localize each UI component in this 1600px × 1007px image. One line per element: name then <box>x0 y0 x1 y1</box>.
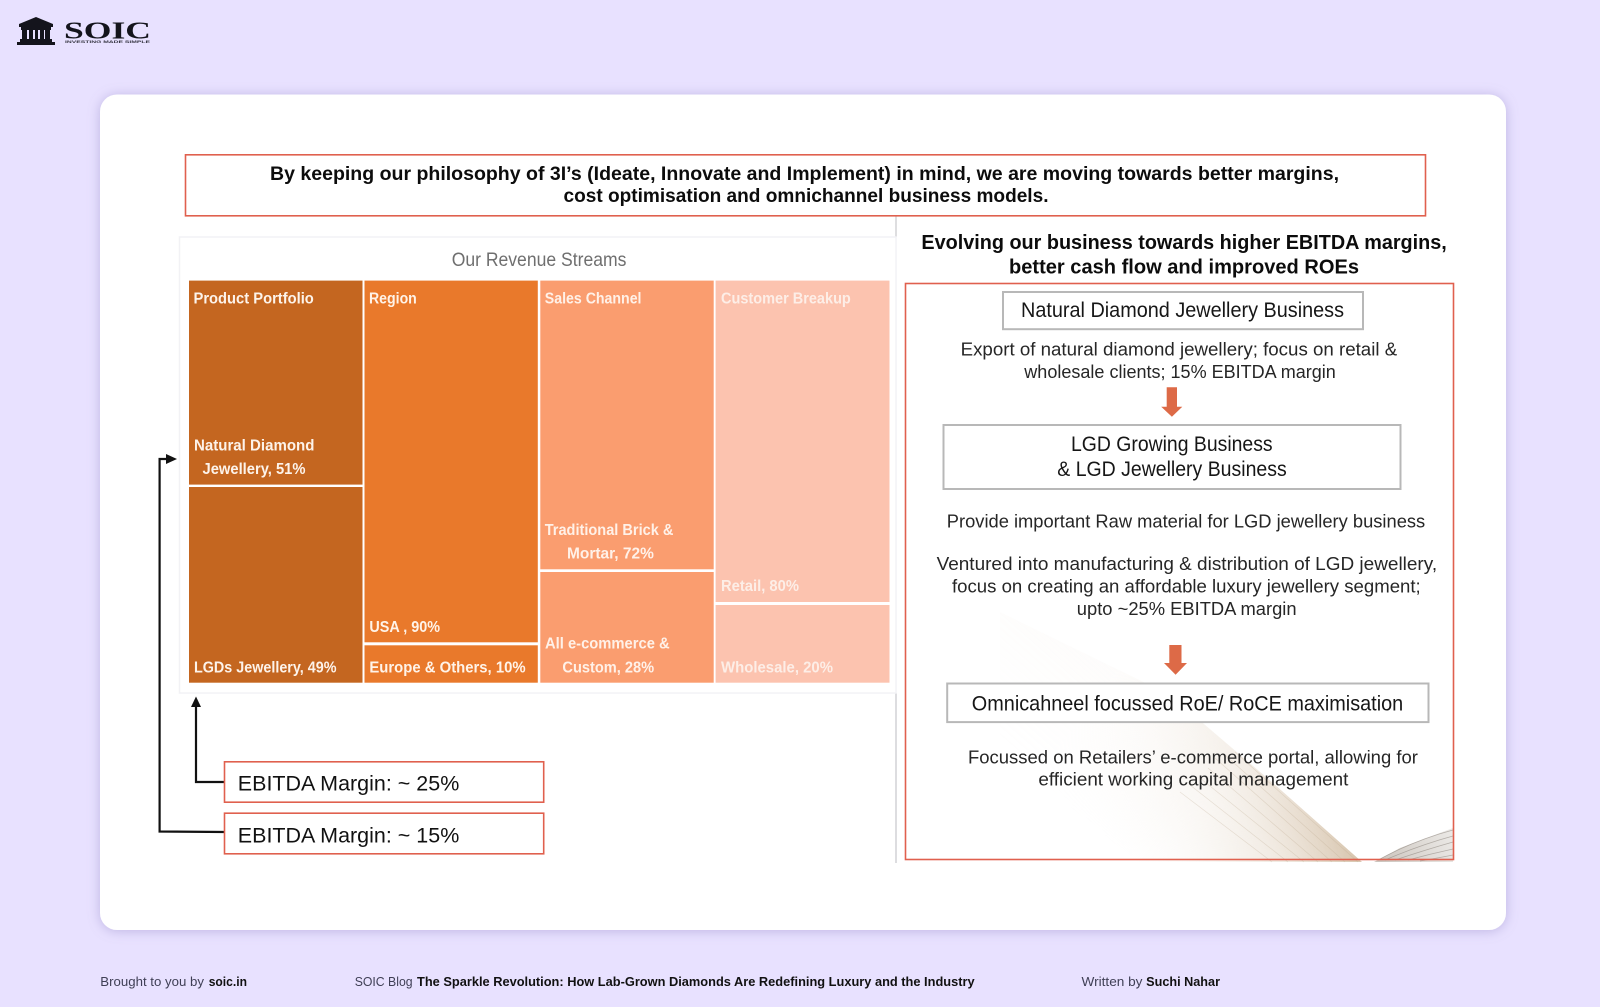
callout: EBITDA margin 25%: EBITDA Margin: ~ 25% <box>238 772 459 796</box>
column: product portfolio: Jewellery, 51% <box>202 461 306 478</box>
headline box <box>186 155 1426 216</box>
white card <box>100 94 1506 930</box>
footer: author <box>1082 975 1220 989</box>
column: sales channel: Sales Channel <box>545 291 642 308</box>
logo wordmark: SOIC <box>64 18 151 44</box>
column: customer breakup: Customer Breakup <box>721 291 851 308</box>
decorative swoosh <box>1154 723 1453 862</box>
step box: natural diamond jewellery business <box>1003 292 1363 329</box>
step box: omnichannel RoE maximisation: Omnicahneel focussed RoE/ RoCE maximisation <box>972 692 1403 716</box>
step box: natural diamond jewellery business: Natural Diamond Jewellery Business <box>1021 298 1344 322</box>
right column heading: Evolving our business towards higher EBITDA margins, <box>921 231 1447 254</box>
column: region: Region <box>369 291 417 308</box>
text: natural diamond description: wholesale clients; 15% EBITDA margin <box>1023 362 1336 382</box>
SOIC logo <box>17 17 151 45</box>
step box: LGD growing business: & LGD Jewellery Business <box>1057 457 1287 481</box>
vertical divider <box>895 216 897 863</box>
text: LGD jewellery description: Ventured into manufacturing & distribution of LGD jewellery, <box>937 554 1437 574</box>
footer: author: Written by <box>1082 975 1143 989</box>
column: region: USA , 90% <box>369 619 440 636</box>
footer: author: Suchi Nahar <box>1146 975 1220 989</box>
column: sales channel: Mortar, 72% <box>567 546 654 563</box>
text: e-commerce portal description <box>968 747 1418 790</box>
column: product portfolio <box>189 281 362 683</box>
column: customer breakup: Wholesale, 20% <box>721 660 833 676</box>
step box: LGD growing business <box>944 425 1400 489</box>
footer: blog title: The Sparkle Revolution: How Lab-Grown Diamonds Are Redefining Luxury and the Industry <box>417 975 975 989</box>
right column heading: better cash flow and improved ROEs <box>1009 256 1359 279</box>
panel: business evolution <box>906 284 1454 862</box>
chart title: Our Revenue Streams <box>452 249 627 271</box>
footer: credit: Brought to you by <box>100 975 205 989</box>
column: product portfolio: LGDs Jewellery, 49% <box>194 660 337 676</box>
headline text <box>270 163 1339 207</box>
column: sales channel <box>540 281 714 683</box>
text: raw material note: Provide important Raw material for LGD jewellery business <box>947 512 1425 532</box>
column: sales channel: Traditional Brick & <box>545 522 673 539</box>
arrow: down to LGD business <box>1161 387 1182 417</box>
text: LGD jewellery description <box>937 554 1437 619</box>
step box: LGD growing business: LGD Growing Business <box>1071 432 1273 456</box>
text: e-commerce portal description: Focussed on Retailers’ e-commerce portal, allowing for <box>968 747 1418 767</box>
text: LGD jewellery description: upto ~25% EBITDA margin <box>1077 599 1297 619</box>
text: e-commerce portal description: efficient working capital management <box>1038 770 1348 790</box>
icon: temple building <box>17 17 55 45</box>
headline text: cost optimisation and omnichannel business models. <box>564 185 1048 207</box>
column: sales channel: Custom, 28% <box>562 660 654 676</box>
text: natural diamond description <box>961 340 1397 382</box>
text: LGD jewellery description: focus on creating an affordable luxury jewellery segment; <box>952 577 1421 597</box>
column: region <box>364 281 538 683</box>
step box: omnichannel RoE maximisation <box>947 684 1428 722</box>
column: sales channel: All e-commerce & <box>545 636 670 652</box>
text: natural diamond description: Export of natural diamond jewellery; focus on retail & <box>961 340 1397 360</box>
column: product portfolio: Product Portfolio <box>194 291 314 308</box>
callout: EBITDA margin 25% <box>224 762 544 802</box>
logo tagline: INVESTING MADE SIMPLE <box>65 40 151 44</box>
panel border <box>906 284 1454 860</box>
column: product portfolio: Natural Diamond <box>194 437 314 454</box>
headline text: By keeping our philosophy of 3I’s (Ideate, Innovate and Implement) in mind, we are moving towards better margins, <box>270 163 1339 185</box>
arrow: 15% margin to natural diamond jewellery <box>160 454 224 832</box>
column: region: Europe & Others, 10% <box>369 660 526 676</box>
callout: EBITDA margin 15%: EBITDA Margin: ~ 15% <box>238 823 459 847</box>
column: customer breakup: Retail, 80% <box>721 578 799 595</box>
arrow: down to omnichannel <box>1164 645 1187 675</box>
panel: revenue streams treemap <box>180 237 896 693</box>
footer: credit <box>100 975 247 989</box>
arrow: 25% margin to LGD jewellery <box>191 696 224 782</box>
footer: credit: soic.in <box>209 975 247 989</box>
footer: blog title: SOIC Blog <box>355 975 413 989</box>
right column heading <box>921 231 1447 279</box>
callout: EBITDA margin 15% <box>224 813 544 854</box>
column: customer breakup <box>716 281 890 683</box>
